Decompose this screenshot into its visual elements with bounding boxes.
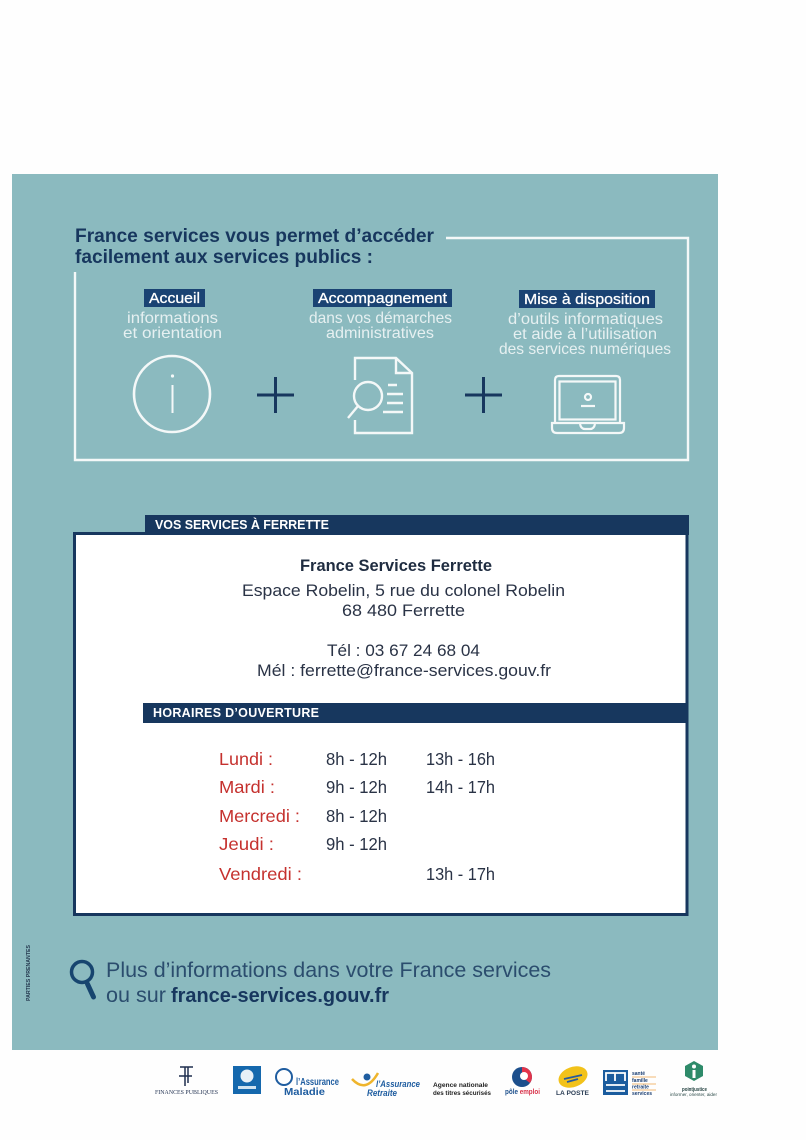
contact details: France Services Ferrette	[300, 557, 492, 575]
heading: facilement aux services publics :	[75, 246, 373, 268]
footer call to action	[72, 959, 551, 1007]
icon: laptop	[552, 376, 624, 433]
logo: assurance retraite: Retraite	[367, 1088, 398, 1099]
description: mise a disposition: et aide à l’utilisation	[513, 326, 657, 343]
description: accompagnement: administratives	[326, 325, 434, 342]
panel: contact and hours	[74, 515, 689, 914]
call to action text	[106, 959, 551, 1007]
heading: France services vous permet d’accéder	[75, 225, 434, 247]
logo: pole emploi	[505, 1067, 540, 1096]
header: horaires: HORAIRES D’OUVERTURE	[153, 706, 319, 720]
description: accompagnement	[309, 310, 452, 342]
times: 14h - 17h	[426, 777, 495, 797]
times	[326, 749, 495, 884]
logo: caf	[233, 1066, 261, 1094]
contact details: Mél : ferrette@france-services.gouv.fr	[257, 661, 551, 680]
frame outline	[75, 238, 688, 460]
call to action text: france-services.gouv.fr	[171, 985, 389, 1007]
call to action text: Plus d’informations dans votre France services	[106, 959, 551, 982]
times: 13h - 17h	[426, 864, 495, 884]
logo: point justice: pointjustice	[682, 1087, 707, 1093]
logo: point justice	[670, 1061, 718, 1097]
icon: plus 2	[465, 377, 502, 413]
contact details	[242, 557, 565, 680]
logo: assurance retraite	[352, 1073, 421, 1099]
header: vos services	[145, 515, 689, 535]
icon: magnifier	[72, 962, 94, 997]
days: Lundi :	[219, 749, 273, 769]
logo: agence nationale des titres securises: des titres sécurisés	[433, 1090, 491, 1097]
description: mise a disposition: d’outils informatiques	[508, 311, 663, 328]
icon: plus 1	[257, 377, 294, 413]
days: Vendredi :	[219, 864, 302, 884]
icon: document with magnifier	[348, 358, 412, 433]
logo: assurance maladie: Maladie	[284, 1087, 325, 1098]
logo: agence nationale des titres securises: Agence nationale	[433, 1082, 488, 1089]
days: Mercredi :	[219, 806, 300, 826]
heading	[75, 225, 434, 268]
logo: agence nationale des titres securises	[433, 1082, 491, 1097]
panel: services frame	[75, 225, 688, 460]
header: horaires	[143, 703, 688, 723]
logo: msa: retraite	[632, 1084, 649, 1090]
icon: information	[134, 356, 210, 432]
description: mise a disposition: des services numériques	[499, 341, 671, 358]
times: 13h - 16h	[426, 749, 495, 769]
contact details: Espace Robelin, 5 rue du colonel Robelin	[242, 581, 565, 600]
label: accueil: Accueil	[149, 290, 200, 307]
logo: la poste	[555, 1062, 591, 1097]
panel: teal background	[12, 174, 718, 1050]
logo: finances publiques: FINANCES PUBLIQUES	[155, 1089, 218, 1096]
times: 9h - 12h	[326, 777, 387, 797]
column: accompagnement	[309, 289, 452, 433]
logo: msa: services	[632, 1091, 652, 1097]
logo: point justice: informer, orienter, aider	[670, 1092, 718, 1097]
call to action text: ou sur	[106, 984, 166, 1007]
header: vos services: VOS SERVICES À FERRETTE	[155, 517, 329, 532]
logo: finances publiques	[155, 1067, 218, 1096]
description: accueil: et orientation	[123, 325, 222, 342]
logo: msa: santé	[632, 1071, 645, 1077]
side note: parties prenantes: PARTIES PRENANTES	[26, 944, 32, 1001]
logo: assurance maladie	[276, 1069, 339, 1098]
logo: la poste: LA POSTE	[556, 1090, 590, 1097]
contact details: 68 480 Ferrette	[342, 601, 465, 620]
logo: pole emploi: pôle emploi	[505, 1089, 540, 1096]
days: Jeudi :	[219, 834, 274, 854]
times: 8h - 12h	[326, 749, 387, 769]
description: mise a disposition	[499, 311, 671, 358]
logo: assurance retraite: l’Assurance	[376, 1079, 421, 1090]
description: accueil	[123, 310, 222, 342]
partner logos	[155, 1061, 718, 1099]
contact details: Tél : 03 67 24 68 04	[327, 641, 480, 660]
logo: msa: famille	[632, 1078, 648, 1084]
times: 9h - 12h	[326, 834, 387, 854]
logo: assurance maladie: l’Assurance	[296, 1077, 339, 1088]
days: Mardi :	[219, 777, 275, 797]
times: 8h - 12h	[326, 806, 387, 826]
description: accueil: informations	[127, 310, 218, 327]
description: accompagnement: dans vos démarches	[309, 310, 452, 327]
column: accueil	[123, 289, 222, 432]
logo: msa	[603, 1070, 656, 1097]
days	[219, 749, 302, 884]
label: mise a disposition: Mise à disposition	[524, 291, 650, 308]
white card	[74, 534, 687, 914]
column: mise a disposition	[499, 290, 671, 433]
label: accompagnement: Accompagnement	[318, 290, 448, 307]
opening hours table	[219, 749, 495, 884]
